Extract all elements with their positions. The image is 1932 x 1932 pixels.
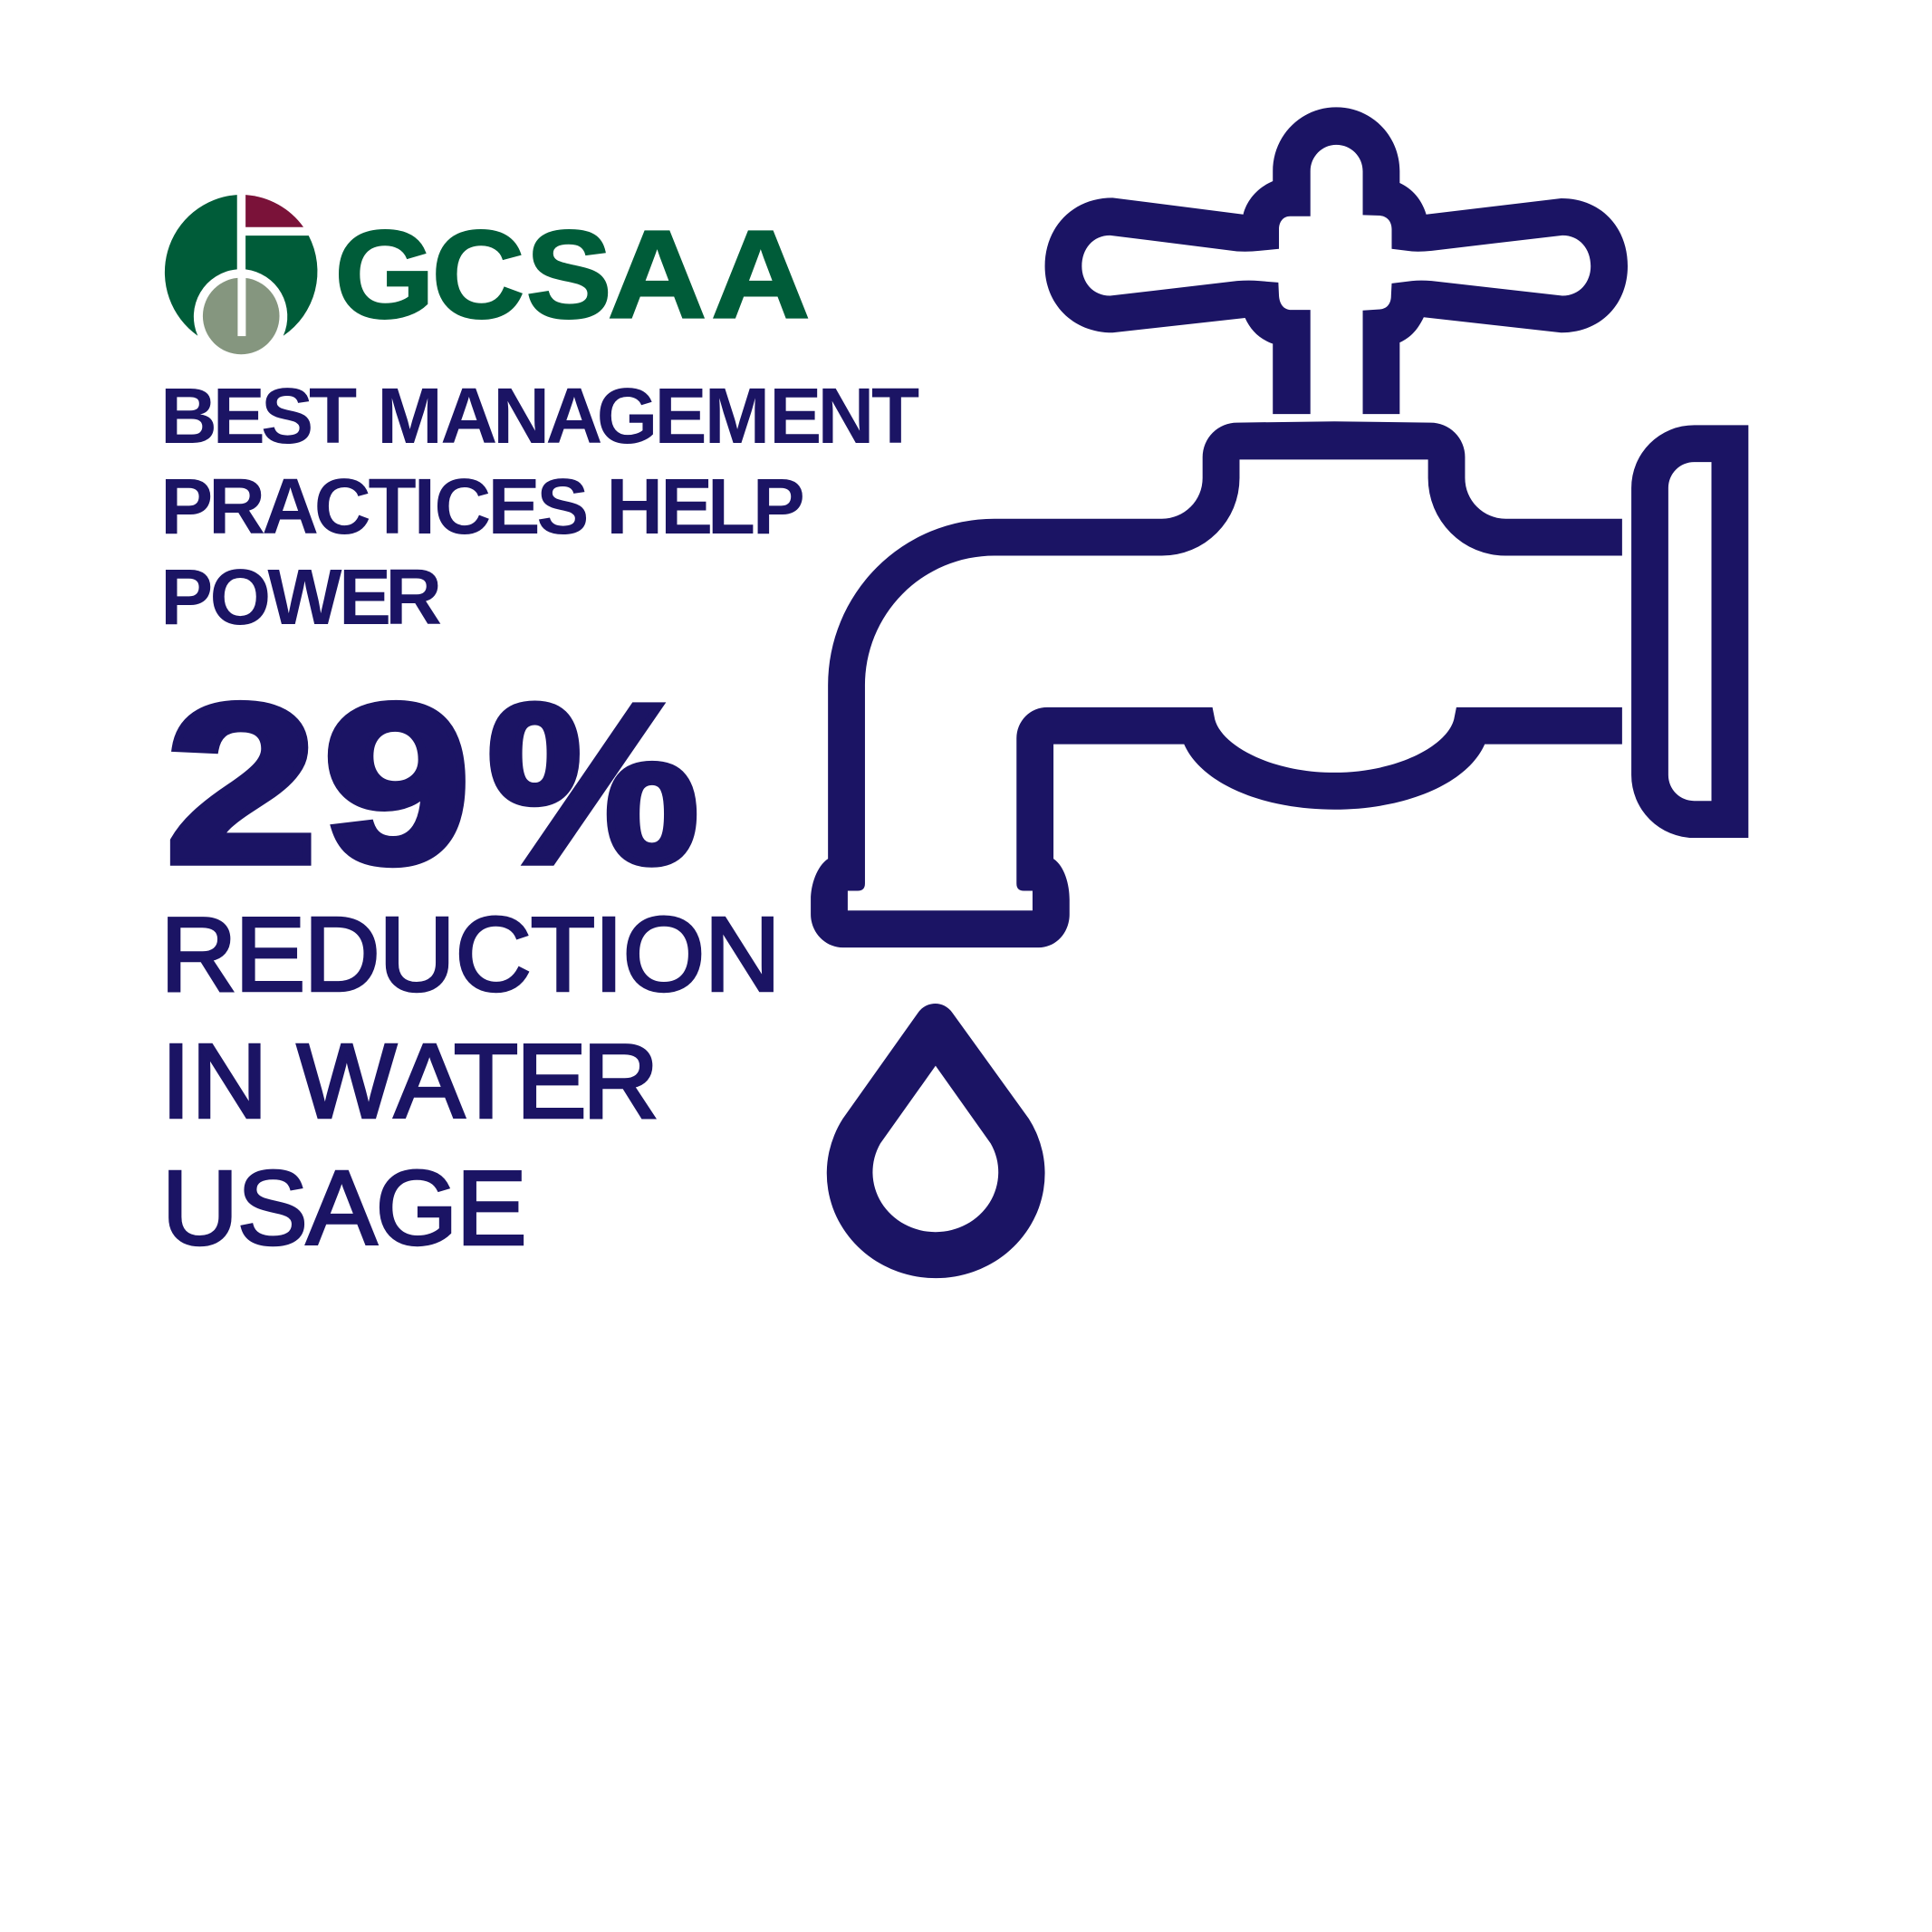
statistic: 29%: 2: [165, 657, 318, 910]
heading line 1: BEST MANAGEMENT: [160, 372, 919, 460]
statistic: 29%: 9: [322, 657, 471, 910]
heading line 2: PRACTICES HELP: [160, 463, 805, 551]
statistic: 29%: [165, 657, 699, 910]
icon: water tap: [811, 107, 1748, 1278]
logo emblem: [165, 195, 317, 354]
statistic: 29%: %: [487, 658, 699, 910]
logo wordmark: [335, 204, 810, 344]
emblem: grey-green green: [203, 276, 280, 354]
emblem: right green segment: [245, 235, 317, 336]
description line 3: USAGE: [162, 1149, 526, 1267]
tap handle: [1045, 107, 1628, 414]
emblem: left green segment: [165, 195, 237, 336]
logo wordmark: GCS: [335, 205, 611, 344]
heading line 3: POWER: [160, 553, 442, 641]
statistic description: [160, 896, 781, 1267]
pipe flange: [1631, 425, 1748, 838]
logo wordmark: AA: [608, 204, 810, 344]
heading text: [160, 372, 919, 641]
description line 2: IN WATER: [161, 1023, 658, 1140]
description line 1: REDUCTION: [160, 896, 781, 1014]
icon: water drop: [827, 1004, 1045, 1278]
logo: GCSAA: [165, 195, 810, 354]
emblem: maroon flag: [245, 195, 303, 227]
tap body and spout: [811, 421, 1622, 947]
